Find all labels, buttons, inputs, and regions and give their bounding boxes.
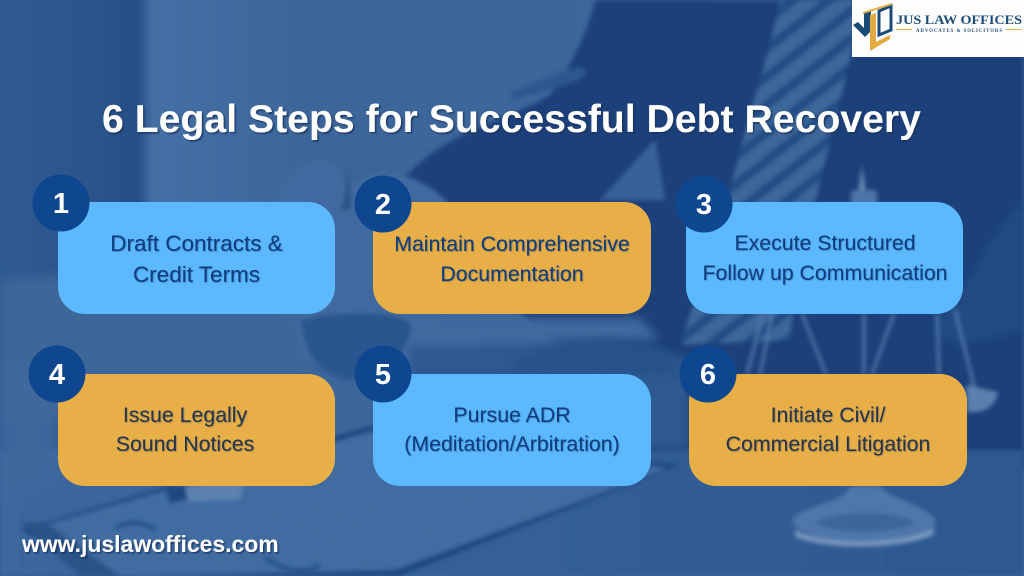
step 2 badge: 2 [375, 189, 391, 221]
step 2 text: Maintain Comprehensive [394, 232, 630, 256]
step 6 text: Initiate Civil/ [771, 403, 885, 427]
step 4 badge [28, 346, 86, 402]
step 4 badge: 4 [49, 359, 65, 391]
scales of justice [747, 165, 998, 546]
pen [165, 478, 245, 503]
signature marks [115, 523, 320, 570]
step 1 card [32, 174, 335, 314]
step 5 card [354, 346, 651, 486]
step 1 badge [32, 174, 90, 232]
step 5 text: (Meditation/Arbitration) [404, 432, 620, 456]
step 4 text: Sound Notices [116, 432, 254, 456]
step 6 badge [680, 346, 736, 402]
step 3 text: Execute Structured [734, 231, 916, 255]
logo tagline: ADVOCATES & SOLICITORS [916, 29, 1002, 34]
step 2 card [354, 176, 651, 314]
hand shake [275, 159, 450, 380]
logo mark [853, 3, 892, 51]
step 1 text: Credit Terms [133, 262, 260, 287]
step 6 card [680, 346, 967, 486]
title: 6 Legal Steps for Successful Debt Recovery [102, 98, 921, 141]
striped tie [680, 0, 860, 345]
step 5 badge [354, 346, 412, 402]
step 5 text: Pursue ADR [453, 403, 571, 427]
step 4 text: Issue Legally [123, 403, 248, 427]
step 6 badge: 6 [700, 359, 716, 391]
step 6 text: Commercial Litigation [726, 432, 930, 456]
step 3 badge: 3 [696, 189, 712, 221]
step 1 badge: 1 [53, 188, 69, 220]
website url: www.juslawoffices.com [21, 531, 279, 557]
step 5 badge: 5 [375, 359, 391, 391]
step 3 badge [676, 176, 732, 232]
step 3 card [676, 176, 963, 314]
cuff and sleeve left [0, 276, 300, 420]
step 2 text: Documentation [440, 262, 584, 286]
logo name: JUS LAW OFFICES [896, 13, 1022, 27]
shirt front beside tie [600, 140, 665, 200]
table [0, 450, 1024, 576]
clipboard [20, 426, 680, 576]
step 4 card [28, 346, 335, 486]
step 1 text: Draft Contracts & [110, 231, 283, 256]
step 2 badge [354, 176, 412, 232]
step 3 text: Follow up Communication [702, 261, 948, 285]
logo [852, 0, 1024, 57]
suit jacket [395, 0, 1024, 470]
